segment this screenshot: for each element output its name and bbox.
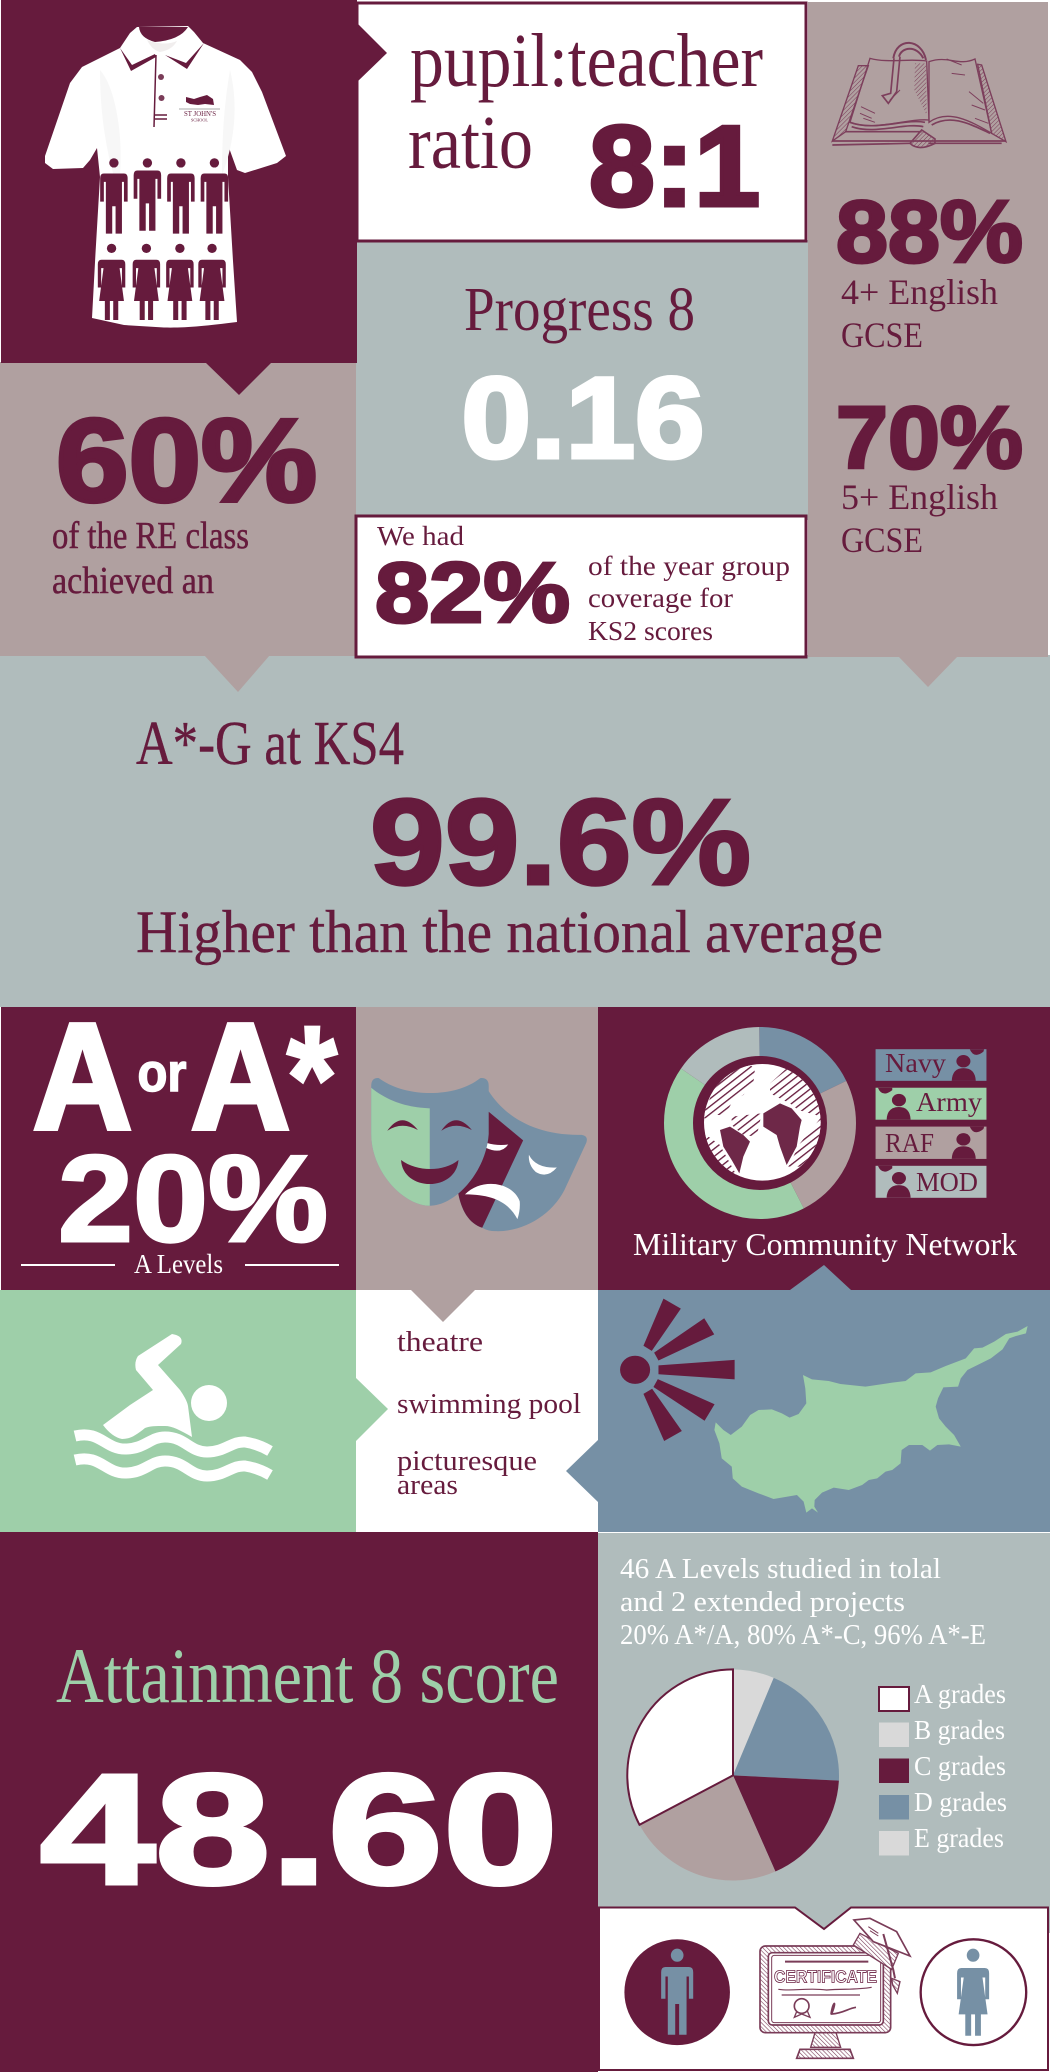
- icon: male pupil: [624, 1939, 730, 2045]
- icon: open book: [832, 43, 1006, 147]
- chart: donut: [678, 1042, 842, 1204]
- text: of the year group: of the year group: [588, 551, 790, 581]
- text: GCSE: GCSE: [841, 520, 923, 560]
- icon: sun: [620, 1299, 735, 1441]
- text: Military Community Network: Military Community Network: [633, 1226, 1017, 1262]
- text: areas: areas: [397, 1469, 458, 1501]
- text: or: or: [138, 1043, 186, 1103]
- panel: swimming: [0, 1290, 388, 1532]
- text: swimming pool: swimming pool: [397, 1388, 581, 1420]
- text: A: A: [33, 992, 132, 1160]
- text: coverage for: coverage for: [588, 583, 733, 613]
- chart: grades pie: [627, 1669, 839, 1880]
- panel: gender and certificate: [599, 1908, 1048, 2070]
- panel: Cyprus: [566, 1265, 1050, 1532]
- text: KS2 scores: KS2 scores: [588, 616, 713, 646]
- text: shirt logo school: SCHOOL: [191, 118, 208, 122]
- panel: military community network: [598, 1007, 1050, 1290]
- icon: theatre masks: [371, 1078, 587, 1231]
- panel: English GCSE: [808, 2, 1048, 687]
- text: Navy: Navy: [885, 1048, 947, 1078]
- tag: Army: [876, 1087, 986, 1120]
- text: B grades: B grades: [914, 1715, 1005, 1745]
- text: MOD: MOD: [916, 1167, 978, 1197]
- panel: 60 percent RE class: [0, 362, 356, 692]
- text: 5+ English: 5+ English: [841, 477, 998, 517]
- text: A Levels: A Levels: [134, 1249, 223, 1279]
- text: RAF: RAF: [885, 1128, 934, 1158]
- pointer up: [790, 1265, 851, 1290]
- heading: Progress 8: Progress 8: [464, 276, 695, 344]
- text: picturesque: picturesque: [397, 1445, 537, 1477]
- text: D grades: D grades: [914, 1787, 1007, 1817]
- icon: swimmer: [75, 1334, 270, 1476]
- panel: A Levels grades: [598, 1533, 1050, 1933]
- text: CERTIFICATE: CERTIFICATE: [774, 1966, 877, 1986]
- text: Army: Army: [916, 1087, 983, 1117]
- icon: polo shirt with pupils: [45, 26, 286, 328]
- figure: 20%: 20%: [58, 1131, 328, 1268]
- panel: Attainment 8: [0, 1532, 598, 2072]
- text: C grades: C grades: [914, 1751, 1006, 1781]
- figure: 70%: 70%: [836, 388, 1023, 487]
- pointer left: [566, 1440, 598, 1502]
- tag: MOD: [876, 1166, 986, 1198]
- text: Higher than the national average: Higher than the national average: [136, 899, 883, 965]
- text: achieved an: achieved an: [52, 560, 214, 602]
- heading: ratio: ratio: [408, 101, 533, 185]
- figure: 82%: 82%: [375, 546, 570, 641]
- tag: RAF: [876, 1127, 986, 1159]
- panel: school shirt: [1, 0, 387, 395]
- text: theatre: theatre: [397, 1326, 483, 1358]
- panel: KS2 coverage: [356, 516, 806, 657]
- text: shirt logo: ST JOHN'S: [184, 110, 216, 118]
- panel: theatre: [356, 1007, 598, 1322]
- text: A grades: A grades: [914, 1679, 1006, 1709]
- text: GCSE: GCSE: [841, 315, 923, 355]
- pointer down into A*-G panel: [204, 655, 270, 692]
- figure: 88%: 88%: [836, 182, 1023, 281]
- tag: Navy: [876, 1048, 986, 1081]
- figure: 99.6%: 99.6%: [370, 774, 751, 910]
- text: E grades: E grades: [914, 1823, 1004, 1853]
- heading: A*-G at KS4: A*-G at KS4: [136, 710, 404, 778]
- text: asterisk: *: [287, 996, 337, 1161]
- icon: sketched globe: [702, 1064, 822, 1181]
- icon: certificate on screen with graduation cap: [760, 1918, 910, 2058]
- text: and 2 extended projects: and 2 extended projects: [620, 1587, 905, 1618]
- text: We had: We had: [377, 521, 465, 551]
- text: 46 A Levels studied in tolal: 46 A Levels studied in tolal: [620, 1554, 941, 1585]
- panel: A or A* 20%: [1, 992, 356, 1290]
- panel: A*-G at KS4: [0, 655, 1050, 1007]
- figure: 0.16: 0.16: [462, 354, 704, 482]
- text: A: A: [191, 992, 290, 1160]
- heading: Attainment 8 score: Attainment 8 score: [56, 1632, 559, 1719]
- figure: 48.60: 48.60: [40, 1742, 558, 1918]
- panel: pupil teacher ratio: [357, 3, 806, 241]
- text: grade percentages: 20% A*/A, 80% A*-C, 96% A*-E: [620, 1620, 986, 1651]
- text: 4+ English: 4+ English: [841, 272, 998, 312]
- panel: amenities list: [356, 1290, 598, 1532]
- legend: [879, 1679, 1007, 1856]
- figure: 8:1: 8:1: [589, 104, 760, 230]
- heading: pupil:teacher: pupil:teacher: [410, 19, 763, 103]
- pointer down: [206, 363, 271, 395]
- panel: Progress 8: [356, 240, 808, 520]
- icon: female pupil: [921, 1939, 1026, 2045]
- pointer right: [357, 23, 387, 82]
- pointer down into A*-G panel: [898, 656, 958, 687]
- figure: 60%: 60%: [56, 395, 317, 527]
- icon: map of Cyprus: [714, 1326, 1028, 1513]
- pointer down: [411, 1290, 475, 1322]
- pointer right: [356, 1378, 388, 1441]
- text: of the RE class: of the RE class: [52, 515, 249, 557]
